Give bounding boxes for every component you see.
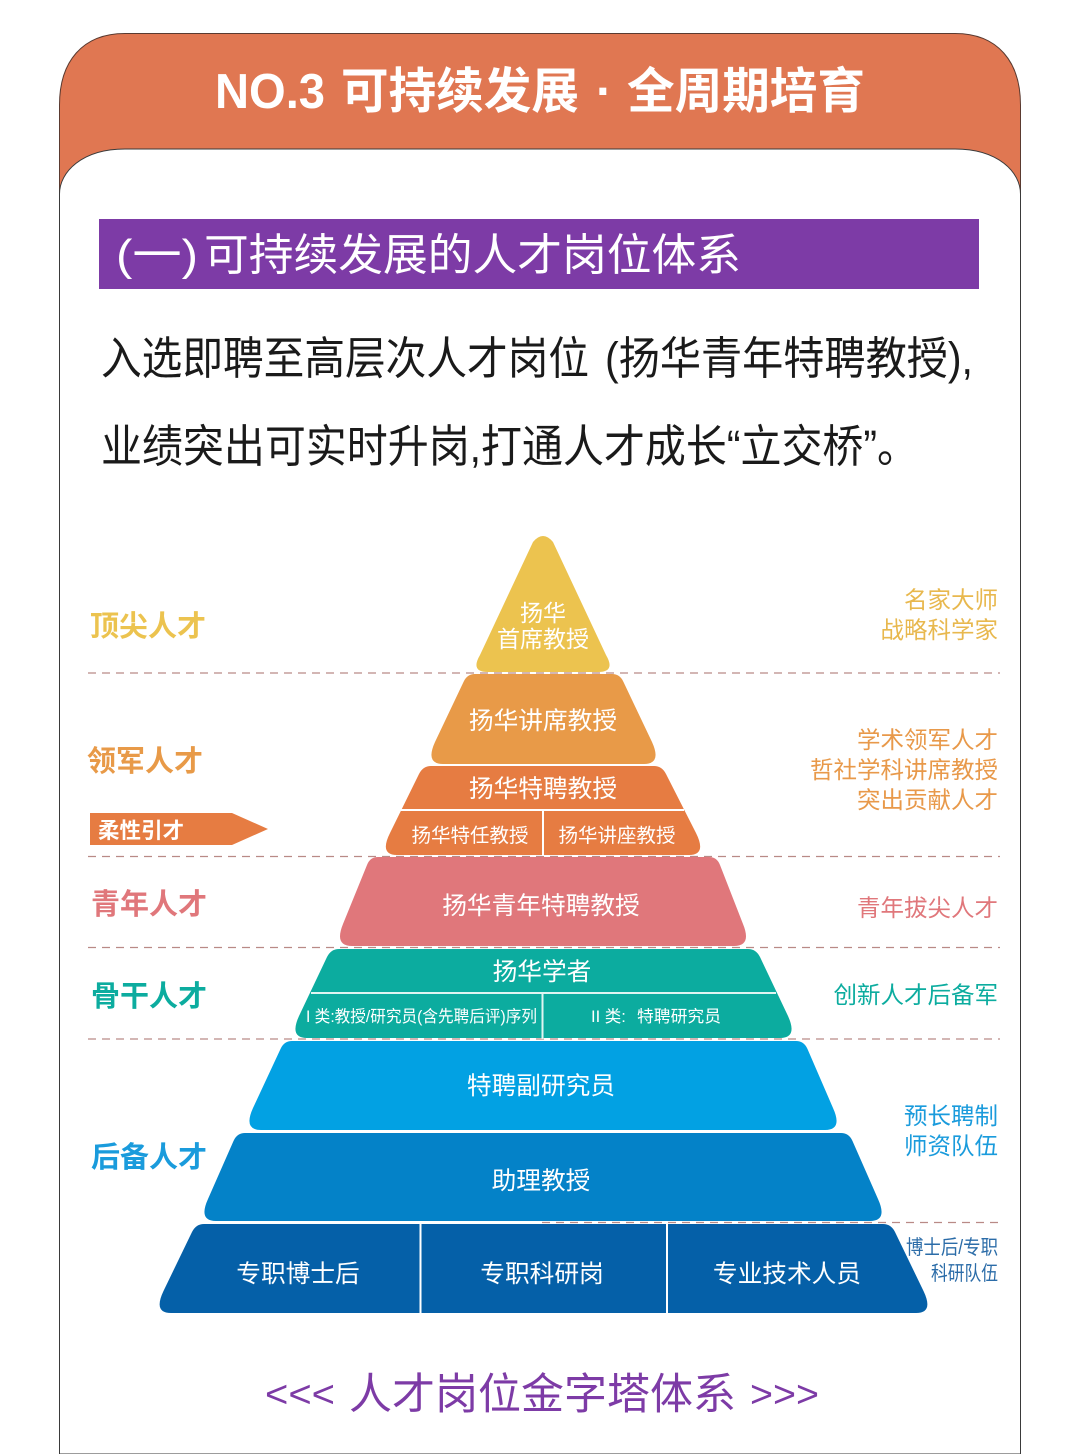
right labels: 博士后/专职 [906, 1236, 998, 1259]
section heading bar: 可持续发展的人才岗位体系 [204, 231, 741, 280]
title: 全周期培育 [627, 65, 865, 119]
right labels: 创新人才后备军 [834, 982, 998, 1008]
tier: 扬华特聘教授: 扬华讲座教授 [558, 825, 676, 847]
right labels [810, 587, 998, 1285]
tier: 专职博士后 / 专职科研岗 / 专业技术人员: 专业技术人员 [713, 1260, 861, 1288]
tier: 扬华首席教授 [476, 536, 610, 672]
caption: 人才岗位金字塔体系 [349, 1371, 736, 1419]
right labels: 突出贡献人才 [857, 787, 998, 813]
tier: 扬华学者: 扬华学者 [493, 958, 591, 986]
tier: 助理教授 [204, 1133, 882, 1221]
right labels: 科研队伍 [931, 1262, 998, 1285]
left labels: 后备人才 [91, 1141, 207, 1174]
right labels: 学术领军人才 [857, 727, 998, 753]
left labels: 顶尖人才 [90, 610, 206, 643]
right labels: 哲社学科讲席教授 [810, 757, 998, 783]
tier: 扬华特聘教授: 扬华特聘教授 [469, 775, 617, 803]
tier: 扬华首席教授: 扬华 [520, 600, 566, 626]
tier: 扬华学者: I 类:教授/研究员(含先聘后评)序列 [306, 1007, 537, 1026]
left labels: 领军人才 [87, 745, 203, 778]
caption [265, 1371, 819, 1419]
title: NO.3 [215, 65, 325, 119]
right labels: 师资队伍 [904, 1133, 998, 1159]
tier: 扬华学者: II 类: [591, 1007, 626, 1026]
tier: 专职博士后 / 专职科研岗 / 专业技术人员 [160, 1224, 927, 1313]
left labels: 青年人才 [91, 888, 207, 921]
arrow label: 柔性引才: 柔性引才 [98, 819, 184, 843]
intro text: 业绩突出可实时升岗,打通人才成长“立交桥”。 [101, 421, 918, 472]
section heading bar: (一) [116, 231, 198, 280]
pyramid chart [160, 536, 927, 1313]
tier: 扬华学者: 特聘研究员 [637, 1007, 721, 1026]
tier: 扬华学者 [295, 949, 792, 1039]
dashed tier separators [88, 673, 1000, 1222]
section heading bar [99, 219, 979, 289]
caption: >>> [750, 1374, 819, 1416]
intro text: (扬华青年特聘教授), [605, 333, 973, 384]
right labels: 战略科学家 [880, 617, 998, 643]
tier: 特聘副研究员 [249, 1041, 837, 1130]
caption: <<< [265, 1374, 335, 1416]
intro text: 入选即聘至高层次人才岗位 [101, 333, 589, 384]
tier: 扬华青年特聘教授 [340, 857, 746, 946]
right labels: 预长聘制 [904, 1103, 998, 1129]
title [215, 65, 865, 119]
tier: 扬华讲席教授: 扬华讲席教授 [469, 707, 617, 735]
left labels: 骨干人才 [91, 980, 207, 1013]
intro text [101, 333, 973, 472]
tier: 特聘副研究员: 特聘副研究员 [467, 1072, 615, 1100]
tier: 专职博士后 / 专职科研岗 / 专业技术人员: 专职科研岗 [480, 1260, 604, 1288]
right labels: 青年拔尖人才 [857, 895, 998, 921]
tier: 扬华特聘教授: 扬华特任教授 [411, 825, 529, 847]
tier: 扬华青年特聘教授: 扬华青年特聘教授 [442, 892, 640, 920]
title: · [596, 65, 612, 119]
tier: 扬华特聘教授 [386, 766, 700, 856]
arrow label: 柔性引才 [90, 813, 268, 845]
tier: 扬华讲席教授 [431, 674, 656, 764]
title: 可持续发展 [341, 65, 579, 119]
tier: 专职博士后 / 专职科研岗 / 专业技术人员: 专职博士后 [236, 1260, 360, 1288]
right labels: 名家大师 [904, 587, 998, 613]
tier: 扬华首席教授: 首席教授 [497, 626, 589, 652]
tier: 助理教授: 助理教授 [492, 1167, 590, 1195]
left labels [87, 610, 207, 1174]
